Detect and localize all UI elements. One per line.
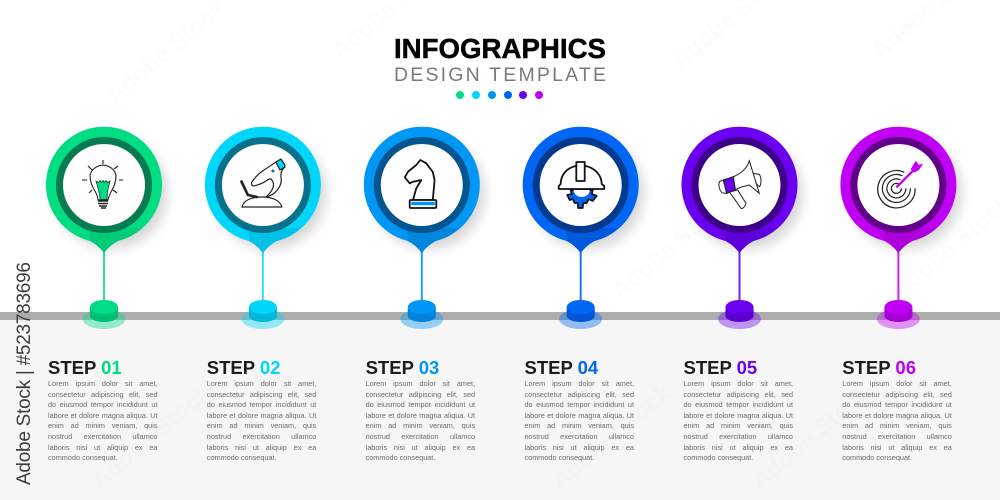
step 3 text: Lorem ipsum dolor sit amet, [366,379,475,388]
subtitle: DESIGN TEMPLATE [394,64,606,86]
step 3 text: commodo consequat. [366,453,435,462]
step 2 text: nostrud exercitation ullamco [207,432,316,441]
step 5 text: commodo consequat. [684,453,753,462]
step 2 text: commodo consequat. [207,453,277,462]
step 1 text: commodo consequat. [48,453,118,462]
step 1 text: enim ad minim veniam, quis [48,421,158,430]
step 6 text: Lorem ipsum dolor sit amet, [842,379,952,388]
step 4 text [524,357,634,462]
step 1 text: STEP 01 [48,357,122,378]
icon: target and arrow [878,161,923,208]
step 2 text: consectetur adipiscing elit, sed [207,390,316,399]
step 2 text: Lorem ipsum dolor sit amet, [207,379,316,388]
pin 6: magenta, target and arrow [840,127,961,329]
step 3 text: laboris nisi ut aliquip ex ea [366,443,475,452]
step 4 text: laboris nisi ut aliquip ex ea [524,443,634,452]
step 5 text: laboris nisi ut aliquip ex ea [684,443,793,452]
step 3 text: STEP 03 [366,357,439,378]
step 5 text: Lorem ipsum dolor sit amet, [684,379,793,388]
step 1 text: labore et dolore magna aliqua. Ut [48,411,158,420]
step 6 text: laboris nisi ut aliquip ex ea [842,443,952,452]
step 3 text [366,357,476,462]
step 4 text: consectetur adipiscing elit, sed [524,390,634,399]
step 2 text: STEP 02 [207,357,280,378]
step 1 text: do eiusmod tempor incididunt ut [48,400,158,409]
step 3 text: labore et dolore magna aliqua. Ut [366,411,475,420]
step 6 text: labore et dolore magna aliqua. Ut [842,411,952,420]
step 5 text: nostrud exercitation ullamco [684,432,793,441]
step 4 text: nostrud exercitation ullamco [524,432,634,441]
step 5 text: consectetur adipiscing elit, sed [684,390,793,399]
colour dots [456,91,543,99]
icon: chess knight [405,160,436,208]
step 2 text: laboris nisi ut aliquip ex ea [207,443,316,452]
stock id vertical text: Adobe Stock | #523783696 [14,262,35,485]
step 5 text: do eiusmod tempor incididunt ut [684,400,793,409]
pin 1: green, light bulb [46,127,167,329]
step 5 text: enim ad minim veniam, quis [684,421,793,430]
step 4 text: commodo consequat. [524,453,594,462]
step 5 text [684,357,793,462]
step 3 text: do eiusmod tempor incididunt ut [366,400,475,409]
step 1 text [48,357,158,462]
icon: microscope [241,159,285,207]
step 6 text [842,357,952,462]
step 1 text: Lorem ipsum dolor sit amet, [48,379,158,388]
step 6 text: do eiusmod tempor incididunt ut [842,400,952,409]
step 3 text: nostrud exercitation ullamco [366,432,475,441]
pin 2: cyan, microscope [205,127,326,329]
title: INFOGRAPHICS [394,33,606,64]
pin 4: royal blue, hard hat and gear [523,127,644,329]
icon: megaphone [719,161,761,209]
step 4 text: do eiusmod tempor incididunt ut [524,400,634,409]
step 1 text: nostrud exercitation ullamco [48,432,158,441]
step 6 text: enim ad minim veniam, quis [842,421,952,430]
step 4 text: STEP 04 [524,357,598,378]
step 2 text: do eiusmod tempor incididunt ut [207,400,316,409]
step 6 text: commodo consequat. [842,453,912,462]
step 4 text: enim ad minim veniam, quis [524,421,634,430]
step 2 text: labore et dolore magna aliqua. Ut [207,411,316,420]
step 4 text: labore et dolore magna aliqua. Ut [524,411,634,420]
step 3 text: enim ad minim veniam, quis [366,421,475,430]
step 6 text: nostrud exercitation ullamco [842,432,952,441]
step 5 text: labore et dolore magna aliqua. Ut [684,411,793,420]
step 2 text [207,357,316,462]
step 5 text: STEP 05 [684,357,757,378]
step 1 text: consectetur adipiscing elit, sed [48,390,158,399]
icon: light bulb [82,160,123,208]
step 6 text: STEP 06 [842,357,916,378]
step 6 text: consectetur adipiscing elit, sed [842,390,952,399]
step 3 text: consectetur adipiscing elit, sed [366,390,475,399]
pin 5: violet, megaphone [682,127,802,329]
icon: hard hat and gear [559,162,604,208]
pin 3: blue, chess knight [364,127,485,329]
step 4 text: Lorem ipsum dolor sit amet, [524,379,634,388]
step 2 text: enim ad minim veniam, quis [207,421,316,430]
step 1 text: laboris nisi ut aliquip ex ea [48,443,158,452]
